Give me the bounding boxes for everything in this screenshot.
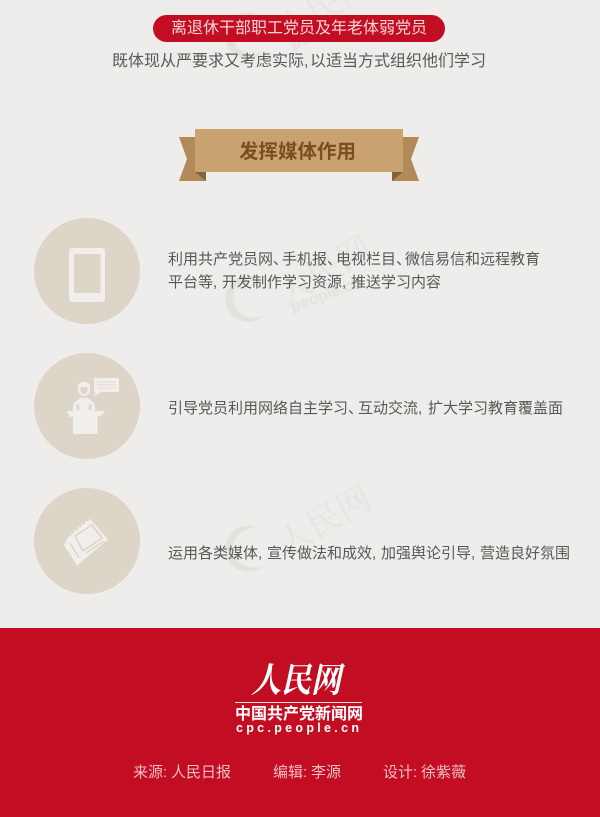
text: platforms: 、 xyxy=(327,251,342,268)
watermarks: people.cn xyxy=(289,11,365,53)
logo: people's daily online xyxy=(235,652,363,735)
watermarks: people.cn xyxy=(289,274,365,316)
text: platforms: , xyxy=(342,274,346,291)
text: media use: 运用各类媒体 宣传做法和成效 加强舆论引导 营造良好氛围 xyxy=(168,545,570,562)
text: media use: , xyxy=(372,545,376,562)
section heading: 发挥媒体作用 xyxy=(239,141,356,163)
text: media use: , xyxy=(471,545,475,562)
text: platforms: , xyxy=(213,274,217,291)
credit: designer: 设计 徐紫薇 xyxy=(383,764,466,781)
logo: people's daily online: cpc.people.cn xyxy=(236,721,362,735)
logo: people's daily online: 人民网 xyxy=(251,652,341,702)
ribbon banner xyxy=(179,129,419,181)
intro text: 既体现从严要求又考虑实际 以适当方式组织他们学习 xyxy=(112,53,486,70)
credit: source: 来源 人民日报 xyxy=(133,764,231,781)
text: online learning: , xyxy=(418,400,422,417)
watermarks: 人民网 xyxy=(266,471,379,565)
watermarks xyxy=(226,0,379,572)
red pill heading: 离退休干部职工党员及年老体弱党员 xyxy=(171,20,427,37)
text: platforms: 、 xyxy=(396,251,411,268)
text: online learning: 引导党员利用网络自主学习 互动交流 扩大学习教育覆盖面 xyxy=(168,400,563,417)
text: platforms: 平台等 开发制作学习资源 推送学习内容 xyxy=(168,274,441,291)
text: platforms xyxy=(168,251,540,291)
red pill heading xyxy=(153,15,445,42)
logo: people's daily online: 中国共产党新闻网 xyxy=(235,706,363,723)
watermarks: 人民网 xyxy=(266,221,379,315)
icon: tablet xyxy=(34,218,140,324)
intro text: , xyxy=(304,53,308,70)
credit: editor: 编辑 李源 xyxy=(273,764,341,781)
text: online learning: 、 xyxy=(348,400,363,417)
text: platforms: 利用共产党员网 手机报 电视栏目 微信易信和远程教育 xyxy=(168,251,540,268)
credit: designer: : xyxy=(413,764,417,781)
text: platforms: 、 xyxy=(273,251,288,268)
icon: newspaper xyxy=(34,488,140,594)
credit: editor: : xyxy=(303,764,307,781)
text: media use: , xyxy=(258,545,262,562)
footer band xyxy=(0,628,600,817)
credit: source: : xyxy=(163,764,167,781)
icon: speaker at podium xyxy=(34,353,140,459)
